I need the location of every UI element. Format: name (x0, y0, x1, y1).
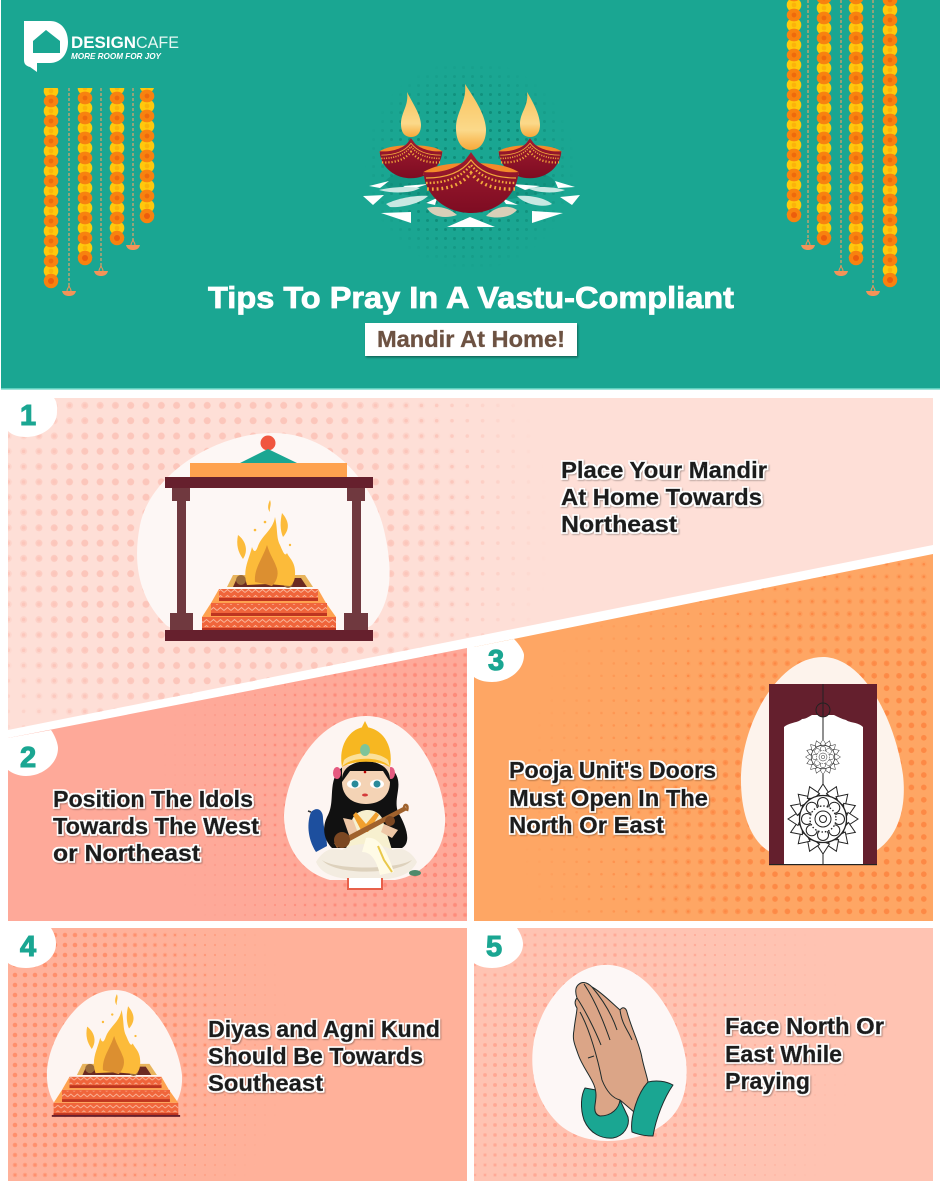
blob behind door (741, 657, 904, 858)
number 1 badge: 1 (20, 400, 36, 432)
subtitle badge: Mandir At Home! (377, 326, 565, 352)
number 1 badge (8, 398, 57, 437)
title: Tips To Pray In A Vastu-Compliant (208, 280, 734, 315)
number 3 badge (474, 639, 524, 682)
text: tip 4: Should Be Towards (208, 1043, 423, 1069)
text: tip 3: North Or East (509, 812, 664, 838)
panel 4: diyas and agni kund (8, 928, 467, 1181)
logo: Design Cafe (24, 21, 179, 72)
number 5 badge: 5 (486, 931, 502, 963)
number 4 badge: 4 (20, 931, 36, 963)
panel 1: place mandir northeast (8, 398, 933, 738)
text: tip 2: Position The Idols (53, 786, 253, 812)
number 4 badge (8, 928, 56, 968)
text: tip 3: Pooja Unit's Doors (509, 757, 716, 783)
text: tip 2 (53, 786, 259, 866)
illustration: three lit diyas on rangoli (363, 75, 580, 258)
blob behind goddess (284, 716, 445, 880)
text: tip 1: Northeast (561, 511, 677, 537)
text: tip 5: Praying (725, 1068, 810, 1094)
text: tip 5: Face North Or (725, 1013, 884, 1039)
blob behind kund (47, 990, 182, 1114)
logo: Design Cafe: MORE ROOM FOR JOY (71, 51, 162, 61)
text: tip 4 (208, 1016, 440, 1096)
number 2 badge: 2 (20, 742, 36, 774)
text: tip 1: At Home Towards (561, 484, 762, 510)
number 2 badge (8, 730, 58, 776)
blob behind mandir (137, 433, 390, 638)
icon: pooja unit door with mandalas (769, 684, 877, 865)
icon: mandir with havan kund (165, 436, 373, 641)
text: tip 1: Place Your Mandir (561, 457, 767, 483)
icon: Saraswati with veena on lotus (308, 721, 421, 890)
number 3 badge: 3 (488, 645, 504, 677)
panel 2: position idols (8, 648, 467, 921)
icon: praying hands (573, 983, 673, 1138)
logo: Design Cafe: CAFE (136, 33, 179, 52)
header banner (1, 0, 940, 390)
blob behind hands (532, 965, 687, 1141)
text: tip 5: East While (725, 1041, 842, 1067)
icon: agni kund (52, 994, 180, 1117)
left hanging marigold garlands and lamps (43, 88, 155, 296)
panel 5: face north or east (474, 928, 933, 1181)
text: tip 2: Towards The West (53, 813, 259, 839)
logo: Design Cafe: DESIGN (71, 33, 136, 52)
text: tip 3 (509, 757, 716, 838)
text: tip 4: Diyas and Agni Kund (208, 1016, 440, 1042)
right hanging marigold garlands and lamps (786, 0, 898, 296)
text: tip 5 (725, 1013, 884, 1094)
text: tip 4: Southeast (208, 1070, 323, 1096)
text: tip 1 (561, 457, 767, 537)
subtitle badge (365, 323, 577, 356)
text: tip 3: Must Open In The (509, 785, 708, 811)
number 5 badge (474, 928, 523, 968)
text: tip 2: or Northeast (53, 840, 200, 866)
panel 3: pooja doors (474, 554, 933, 921)
